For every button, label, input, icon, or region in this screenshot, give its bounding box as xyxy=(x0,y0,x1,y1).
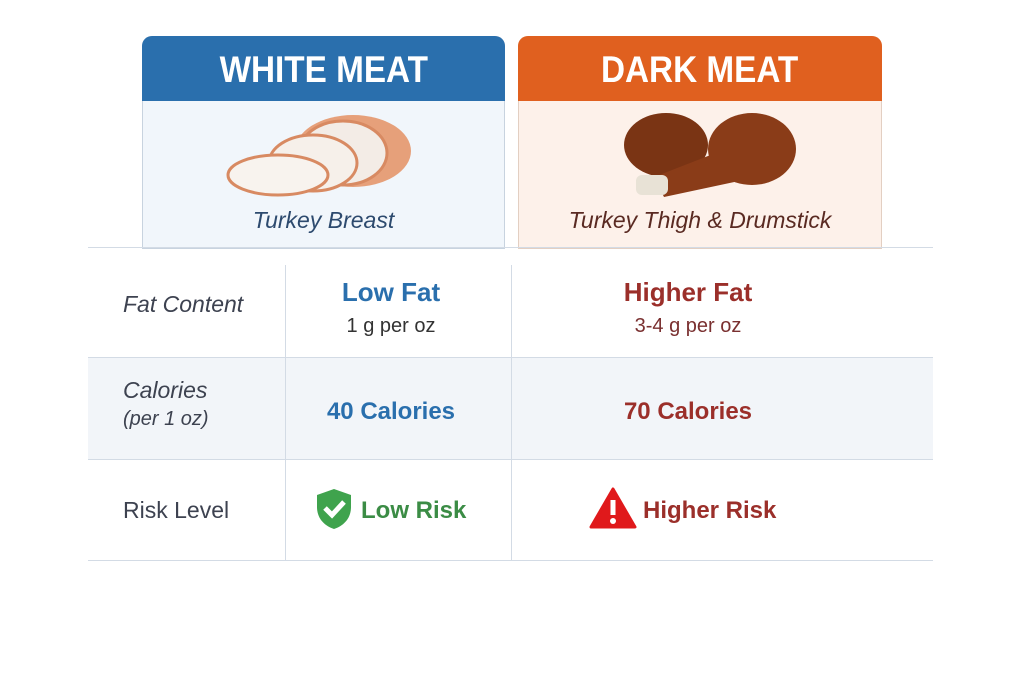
icon: warning xyxy=(590,487,637,528)
row: fat content: 3-4 g per oz xyxy=(635,315,741,337)
text: thigh & drumstick: Turkey Thigh & Drumstick xyxy=(569,207,831,233)
row: fat content: Fat Content xyxy=(123,291,243,317)
row: risk level: Risk Level xyxy=(123,497,229,523)
panel: dark meat xyxy=(518,36,882,249)
row: risk level xyxy=(123,487,776,529)
table xyxy=(88,247,933,561)
row: calories xyxy=(123,377,752,430)
icon: shield check xyxy=(317,489,351,529)
row: calories: Calories xyxy=(123,377,207,403)
row: calories: 40 Calories xyxy=(327,398,455,425)
panel: white meat xyxy=(142,36,505,249)
row: fat content: Higher Fat xyxy=(624,277,752,307)
row: calories: (per 1 oz) xyxy=(123,408,209,430)
row: calories: 70 Calories xyxy=(624,398,752,425)
row: risk level: Higher Risk xyxy=(643,497,776,524)
row: risk level: Low Risk xyxy=(361,497,466,524)
text: turkey breast: Turkey Breast xyxy=(253,207,394,233)
row: fat content: Low Fat xyxy=(342,277,440,307)
heading: dark meat xyxy=(518,36,882,101)
heading: white meat xyxy=(142,36,505,101)
row: fat content: 1 g per oz xyxy=(347,315,435,337)
row: fat content xyxy=(123,277,752,337)
heading: dark meat: DARK MEAT xyxy=(601,49,799,90)
heading: white meat: WHITE MEAT xyxy=(219,49,428,90)
icon: drumsticks xyxy=(624,113,796,197)
icon: turkey breast xyxy=(226,115,411,196)
